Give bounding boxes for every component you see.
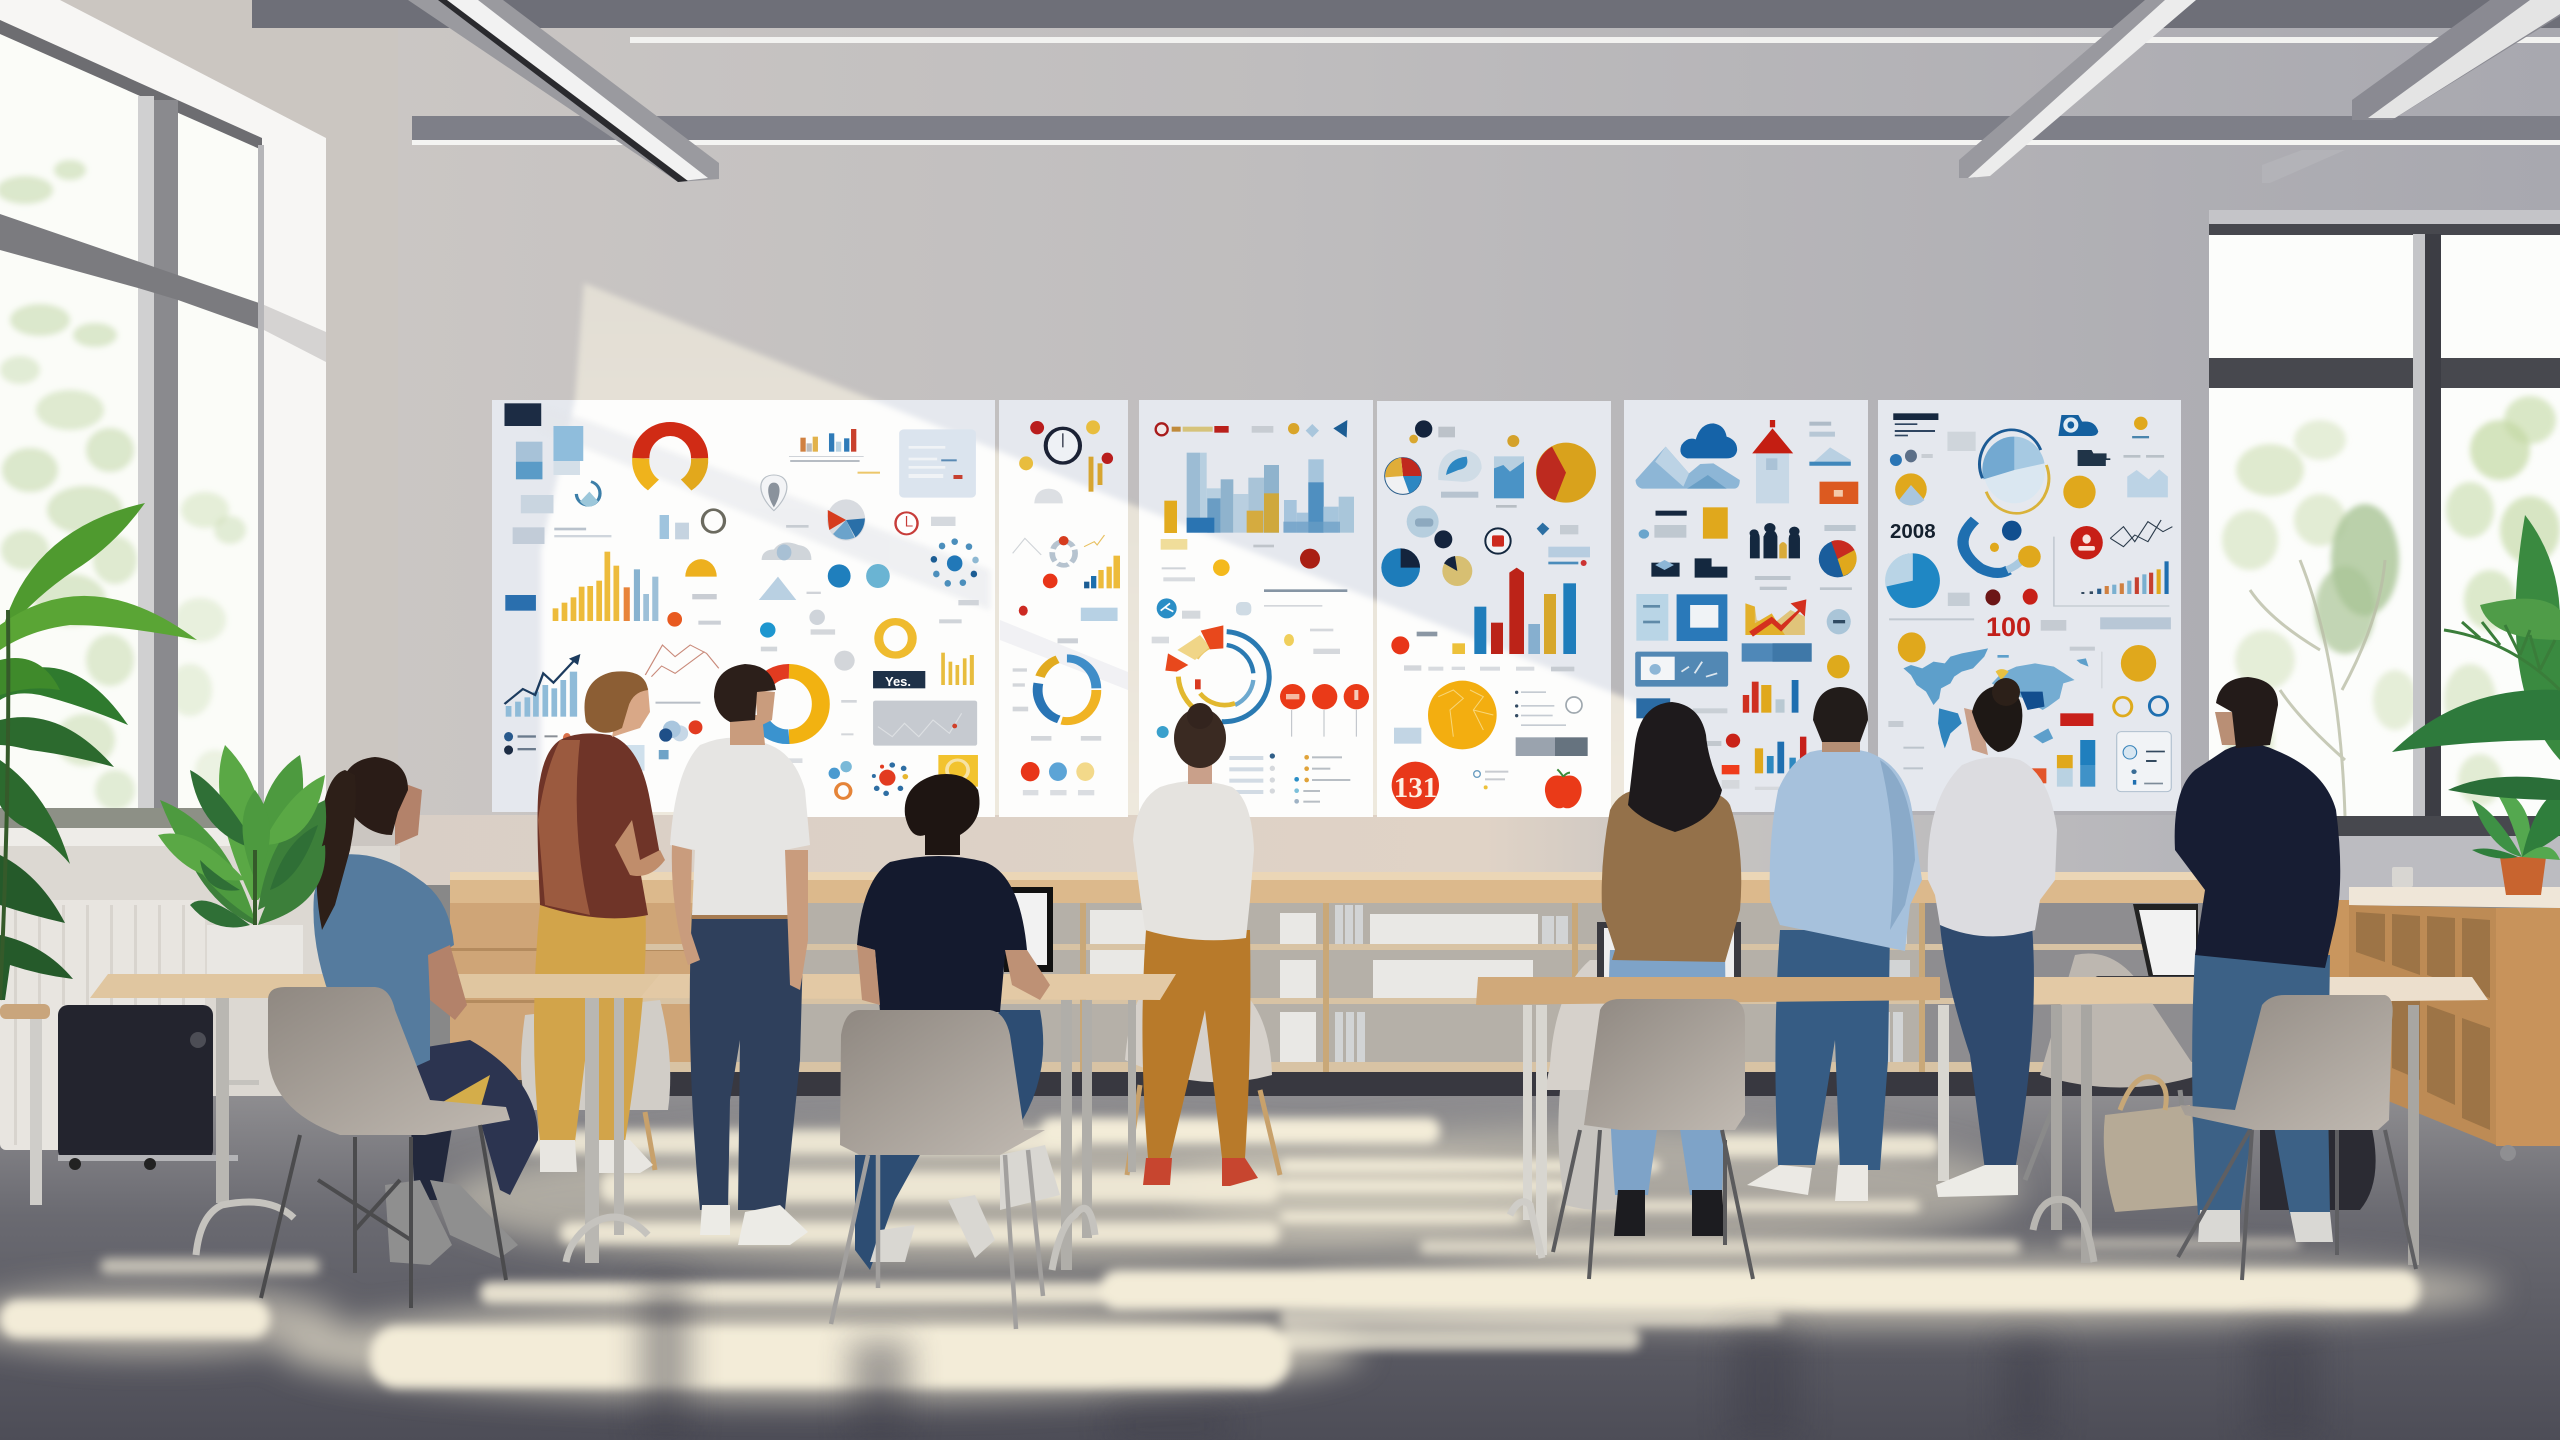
head and hair — [1972, 685, 2022, 752]
lower beam — [412, 116, 2560, 142]
sweater — [1133, 781, 1254, 940]
wall under window — [0, 846, 400, 1106]
desktop — [1476, 977, 1940, 1005]
person: seated boy — [855, 774, 1060, 1270]
desk left — [90, 974, 690, 1263]
hair — [584, 671, 648, 733]
red pins — [1292, 710, 1356, 737]
abstract blob chart — [1438, 449, 1482, 482]
chair legs — [1553, 1130, 1753, 1279]
shoes — [1936, 1165, 2018, 1197]
blue and yellow pies — [1381, 548, 1472, 587]
shelf base shadow — [640, 1072, 2210, 1096]
dark bag under right table — [2260, 1120, 2376, 1210]
face — [395, 780, 422, 845]
poster 1 and 2 and 3 graphics (left group) — [504, 403, 1120, 798]
person: man in maroon shirt — [534, 671, 665, 1173]
long hair — [1628, 702, 1722, 832]
red line chart — [645, 645, 719, 677]
clock — [1046, 428, 1080, 463]
stacked bars — [2057, 740, 2095, 787]
shoes — [1614, 1190, 1725, 1236]
tower icon — [1752, 420, 1793, 503]
number in red badge: 131 — [1394, 772, 1437, 804]
shoes — [385, 1180, 518, 1265]
person: man in white polo — [670, 664, 810, 1245]
right window — [2209, 210, 2560, 906]
upper left wall corner — [60, 0, 398, 880]
shoes — [700, 1205, 808, 1245]
poster 4 graphics — [1152, 420, 1369, 804]
cabinet wheel — [2500, 1145, 2516, 1161]
dot ring — [931, 538, 979, 587]
poster 1 graphics — [504, 403, 724, 771]
window mullion — [138, 96, 178, 816]
shoes — [2198, 1210, 2333, 1242]
left ceiling light — [408, 0, 719, 182]
desk legs — [216, 998, 624, 1263]
shelf back — [640, 903, 2210, 1080]
desk right two — [1970, 904, 2488, 1265]
lower bars — [1755, 737, 1806, 773]
poster 3 graphics — [1013, 420, 1120, 795]
mountains — [1636, 447, 1740, 489]
window header — [2209, 210, 2560, 224]
shelf boards — [640, 944, 2210, 1072]
frame transom — [2209, 358, 2560, 388]
dot ring chart — [1052, 536, 1075, 565]
pie chart — [827, 499, 865, 541]
stem — [253, 850, 257, 925]
left wood cabinet — [450, 903, 720, 1080]
legend card — [2117, 732, 2171, 792]
outdoor trees — [2222, 396, 2560, 816]
lower light strip — [412, 140, 2560, 145]
head hair — [2216, 677, 2278, 748]
ascending bars — [2081, 561, 2169, 594]
arm — [428, 945, 467, 1020]
upper beam — [252, 0, 2560, 28]
jeans — [1775, 930, 1890, 1170]
counter top — [450, 877, 2210, 903]
jacket — [2175, 744, 2340, 968]
laptop — [1004, 887, 1053, 972]
face with beard — [755, 690, 775, 727]
yellow globe — [1428, 681, 1497, 749]
desk crossbar — [229, 1080, 259, 1085]
white window reveal — [0, 0, 326, 850]
frame top — [2209, 224, 2560, 235]
head — [1174, 708, 1226, 768]
blue cloud badge — [2058, 415, 2098, 436]
radial ring chart — [1178, 632, 1269, 722]
lower leg — [410, 1110, 455, 1200]
potted plant base — [207, 925, 303, 975]
desk legs — [1061, 1000, 1136, 1270]
pie chart small — [1385, 458, 1421, 494]
shelving unit — [450, 872, 2211, 1096]
plant: left window large plant — [0, 503, 197, 1000]
chair left — [261, 987, 510, 1308]
shirt — [313, 854, 454, 1070]
glass — [2209, 224, 2560, 836]
poster 7 graphics — [1885, 413, 2172, 792]
chair centre — [831, 1010, 1045, 1329]
desktop — [90, 974, 690, 998]
jeans — [408, 1040, 538, 1195]
jeans — [1940, 925, 2034, 1170]
floor shadows — [640, 1280, 2320, 1440]
chair right one — [1553, 999, 1753, 1279]
red badge — [1392, 762, 1439, 809]
red and blue bars — [1743, 680, 1798, 713]
shoes — [870, 1145, 1060, 1262]
desktop — [1970, 977, 2488, 1005]
hair bun — [1187, 703, 1213, 729]
dark Yes label — [873, 671, 925, 688]
white storage boxes — [1090, 910, 1880, 1062]
person: seated girl — [313, 757, 538, 1265]
sweater — [1928, 757, 2057, 936]
blue frame — [1677, 594, 1727, 641]
shirt — [1770, 748, 1922, 951]
chair legs — [261, 1125, 506, 1308]
red person badge — [2070, 526, 2103, 559]
small terracotta pot — [2500, 857, 2546, 895]
shirt — [857, 856, 1027, 1012]
yellow thin bars — [941, 653, 974, 685]
shirt — [538, 733, 660, 918]
head and hair — [905, 774, 980, 855]
neck and face — [2215, 712, 2240, 745]
plant: large plant right — [2392, 515, 2560, 800]
year label: 2008 — [1890, 520, 1936, 543]
chair back and seat — [1584, 999, 1745, 1130]
person: man in blue shirt — [1747, 687, 1922, 1201]
back stool middle-right — [1545, 960, 1640, 1090]
person: man in navy jacket — [2175, 677, 2340, 1242]
people icon — [1750, 523, 1800, 558]
hair — [714, 664, 776, 722]
frame bottom — [2209, 816, 2560, 836]
laptop behind woman in brown jacket — [1597, 922, 1741, 984]
reveal shadow — [262, 304, 326, 362]
right half pale desktop — [2300, 977, 2488, 1002]
ring pie chart — [1980, 430, 2049, 513]
face — [1964, 708, 1988, 755]
arms — [1005, 950, 1050, 1000]
tall bar chart — [1474, 568, 1576, 654]
dot burst — [872, 762, 908, 796]
red shoes — [1143, 1158, 1258, 1186]
outdoor foliage left — [0, 160, 246, 810]
sunlight patches on floor — [0, 1118, 2420, 1388]
mullion — [2413, 234, 2441, 816]
radiator — [0, 900, 205, 1150]
neck — [730, 715, 765, 745]
poster 2 label Yes: Yes. — [885, 674, 911, 689]
plant: small potted plant right — [2472, 783, 2560, 860]
chair legs — [831, 1150, 1043, 1329]
chair right two — [2178, 995, 2416, 1280]
zigzag lines — [2110, 520, 2172, 547]
poster 6 and 7 graphics — [1635, 413, 2172, 792]
small bars — [1084, 556, 1120, 588]
pin icon — [761, 475, 787, 511]
chair legs — [2178, 1130, 2416, 1280]
foliage — [158, 745, 326, 928]
arm — [615, 820, 665, 876]
window transom — [0, 214, 262, 330]
back stool left — [520, 1000, 670, 1170]
back wall — [0, 0, 2560, 880]
right wooden cabinet — [2270, 857, 2560, 1161]
sunlight on posters — [540, 400, 1643, 817]
far right ceiling light — [2262, 0, 2560, 183]
blue pie chart — [1885, 553, 1940, 608]
ponytail — [316, 770, 356, 930]
cup — [2392, 867, 2413, 887]
face — [612, 688, 650, 737]
shoes — [1747, 1165, 1868, 1201]
lower wall strip — [398, 815, 2210, 885]
tote bag — [2104, 1077, 2205, 1212]
jeans — [2192, 955, 2330, 1215]
world map — [1903, 648, 2089, 748]
window right frame — [258, 145, 264, 825]
desk feet — [196, 1202, 648, 1262]
desktop — [640, 974, 1176, 1000]
laptop — [2133, 904, 2198, 983]
trousers — [1142, 930, 1250, 1158]
belt — [692, 910, 804, 919]
window sill — [0, 808, 330, 846]
yellow bar chart — [553, 552, 658, 621]
yellow mountain circle — [1895, 473, 1927, 505]
desk right one — [1476, 977, 1949, 1258]
mouse and keyboard — [2095, 976, 2195, 984]
blue circle icon — [1157, 598, 1177, 618]
floor — [0, 1096, 2560, 1440]
jacket — [1602, 790, 1741, 962]
poster 6 graphics — [1635, 420, 1858, 790]
neck — [1188, 762, 1212, 784]
ceiling beams — [252, 0, 2560, 145]
large pie chart — [1536, 443, 1596, 503]
person: woman in white sweater centre — [1133, 703, 1258, 1186]
hair bun — [1992, 678, 2020, 706]
poster 5 graphics — [1381, 420, 1596, 809]
right ceiling light — [1959, 0, 2196, 178]
side stool — [0, 1004, 50, 1205]
person: woman in brown jacket — [1602, 702, 1741, 1236]
layered bar chart — [1164, 453, 1354, 533]
blue area square — [1494, 457, 1524, 498]
cubbies — [2356, 912, 2490, 1130]
axis — [2054, 537, 2169, 606]
jeans — [855, 1010, 1043, 1270]
leaves — [0, 503, 197, 1000]
palm fronds — [2444, 622, 2560, 690]
chair back and seat — [2180, 995, 2393, 1130]
rising arrow — [504, 654, 580, 704]
desk legs — [2051, 1005, 2419, 1265]
poster wall — [492, 400, 2181, 817]
pie chart — [1819, 540, 1857, 577]
broad floor glow — [0, 1125, 2500, 1400]
head — [1813, 687, 1868, 742]
upper light strip — [630, 37, 2560, 43]
sunlight patch on wall — [541, 283, 1700, 830]
gauge — [576, 481, 600, 507]
person: woman in white sweater right — [1928, 678, 2057, 1197]
window glass — [0, 30, 258, 815]
binders — [890, 905, 1910, 1062]
neck — [1822, 735, 1860, 752]
poster 4 and 5 graphics — [1152, 420, 1596, 809]
big leaves — [2392, 515, 2560, 800]
window top frame — [0, 20, 262, 150]
back stool right — [2025, 953, 2200, 1180]
polo shirt — [670, 738, 810, 915]
growth chart — [1745, 599, 1806, 637]
apple icon — [1545, 769, 1582, 808]
info card — [899, 429, 976, 498]
line chart card — [873, 701, 977, 746]
yellow gear — [879, 622, 912, 655]
grey backpack — [1558, 1090, 1640, 1210]
list rows — [1229, 753, 1350, 804]
left window — [0, 0, 400, 1106]
head — [340, 757, 408, 835]
blue bars — [506, 672, 577, 717]
trousers — [534, 905, 646, 1142]
jeans — [1608, 950, 1726, 1195]
plant: potted plant behind desk — [158, 745, 326, 928]
poster backgrounds — [492, 400, 2181, 817]
stem — [0, 610, 8, 1000]
year-side arc graphic — [1963, 520, 2024, 573]
poster 2 graphics — [759, 429, 979, 798]
sun icon — [685, 559, 717, 577]
cloud icon — [1680, 423, 1737, 458]
ring icon — [1485, 528, 1511, 554]
shelf posts — [880, 903, 1925, 1073]
wall under right window — [2209, 836, 2560, 906]
black storage case — [58, 1005, 238, 1170]
cabinet top — [2349, 887, 2560, 908]
shoes — [540, 1140, 653, 1173]
arms — [672, 845, 808, 990]
desk centre — [640, 887, 1176, 1270]
chair back and seat — [840, 1010, 1045, 1155]
donut chart — [641, 429, 700, 485]
back stool centre — [1125, 985, 1280, 1175]
red number 100: 100 — [1986, 612, 2031, 642]
chair back and seat — [268, 987, 510, 1135]
desk legs — [1523, 1005, 1949, 1255]
poster 3 donut — [1038, 658, 1096, 721]
central donut chart — [762, 671, 821, 737]
jeans — [690, 912, 804, 1210]
